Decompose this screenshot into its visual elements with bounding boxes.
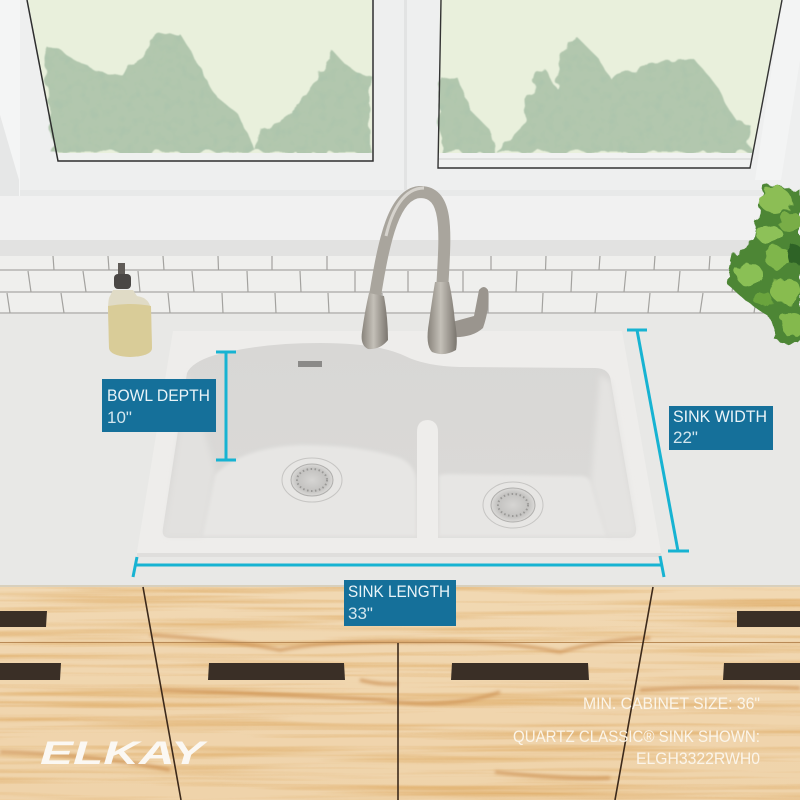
wall and window frame [0, 0, 800, 256]
logo: Elkay: ELKAY [40, 735, 208, 771]
shrubs outside left window [45, 32, 372, 153]
drawer and door handles [0, 611, 800, 680]
countertop [0, 314, 800, 587]
backsplash tiles [0, 256, 800, 316]
model note: ELGH3322RWH0 [636, 750, 760, 768]
left bowl floor [203, 445, 416, 536]
right window pane [438, 0, 782, 168]
dimension: sink length: SINK LENGTH [348, 582, 450, 601]
model note [513, 728, 760, 768]
cabinets [0, 585, 800, 800]
left window pane [27, 0, 373, 161]
right drain [483, 482, 543, 528]
dimension: sink length: 33" [348, 604, 373, 623]
faucet base [428, 282, 457, 354]
dimension: sink width: SINK WIDTH [673, 407, 767, 426]
dimension: bowl depth [102, 352, 236, 460]
dimension: sink length [133, 556, 664, 626]
left drain [282, 458, 342, 502]
dimension: bowl depth: BOWL DEPTH [107, 386, 210, 405]
basin [163, 343, 636, 538]
bowl divider [417, 420, 438, 538]
cabinet size note: MIN. CABINET SIZE: 36" [583, 695, 760, 713]
model note: QUARTZ CLASSIC® SINK SHOWN: [513, 728, 760, 746]
pull-down head [362, 293, 388, 349]
spout [375, 192, 444, 296]
side walls [165, 373, 215, 536]
plant [728, 184, 800, 345]
faucet [362, 188, 488, 354]
dimension: bowl depth: 10" [107, 408, 132, 427]
shrubs outside right window [440, 36, 752, 153]
lever handle [452, 287, 488, 337]
dimension: sink width [627, 330, 773, 551]
sink [137, 331, 661, 557]
sink deck [137, 331, 661, 556]
dimension: sink width: 22" [673, 428, 698, 447]
maker badge [298, 361, 322, 367]
icon: soap bottle [108, 263, 152, 357]
right bowl floor [439, 474, 606, 536]
